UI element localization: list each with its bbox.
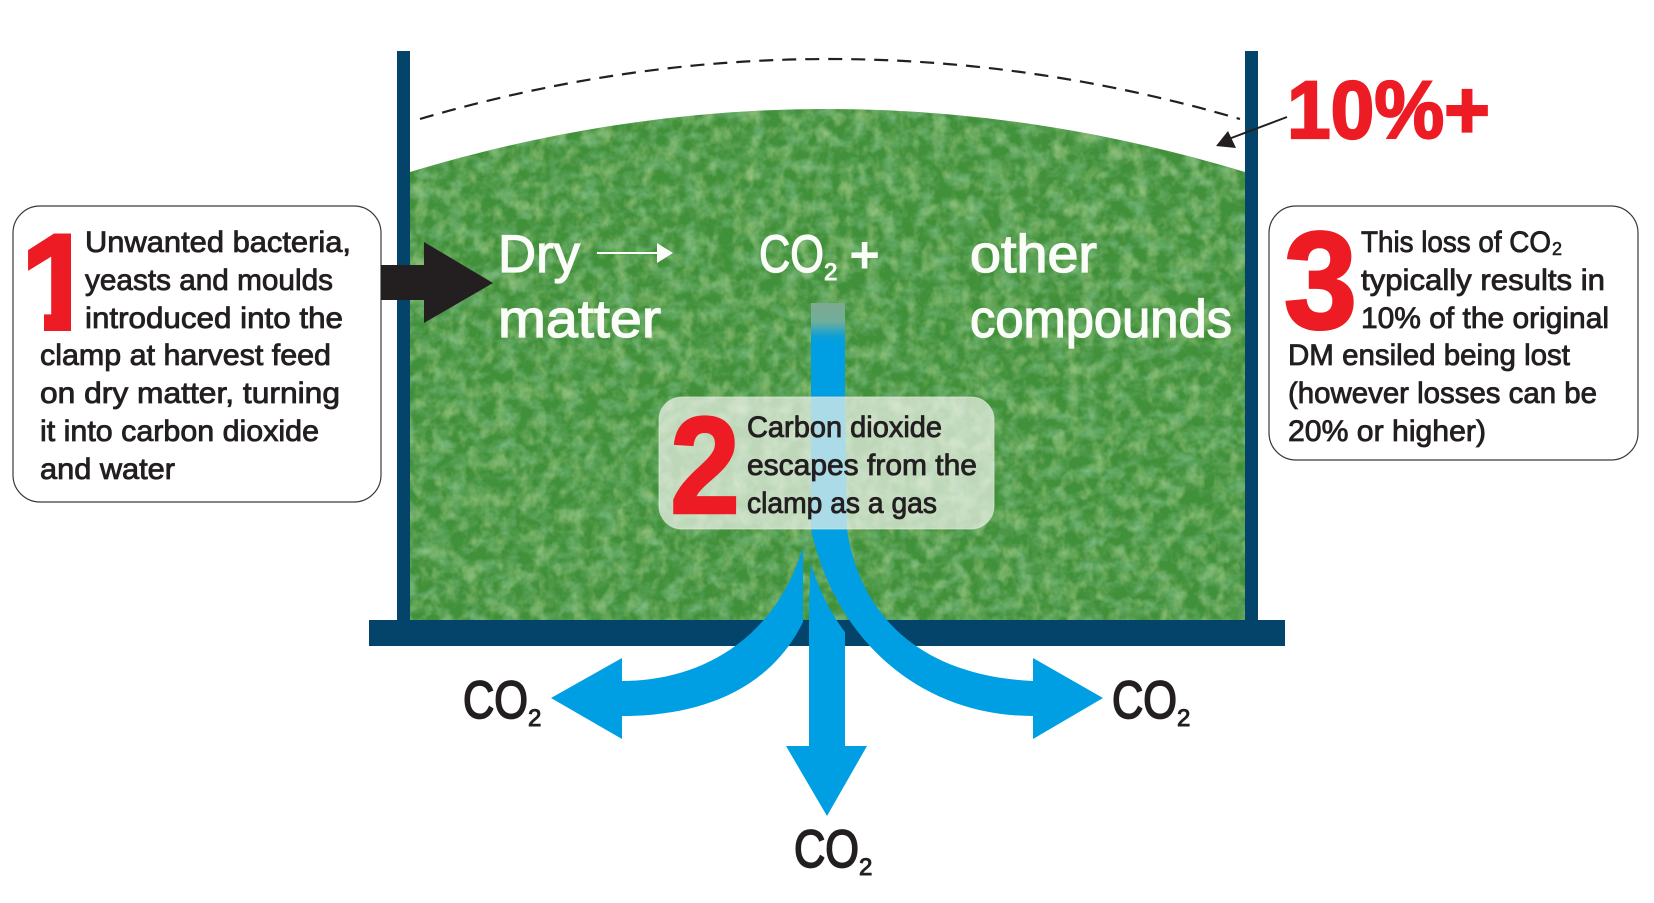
dashed original silage level — [420, 59, 1240, 119]
callout 3: loss: (however losses can be — [1288, 377, 1597, 410]
callout 1: bacteria: Unwanted bacteria, — [85, 226, 351, 259]
big figure: 10%+: 10%+ — [1287, 65, 1490, 156]
callout 1: bacteria: on dry matter, turning — [40, 377, 340, 410]
callout 1: bacteria — [13, 206, 381, 502]
arrow: bacteria entering clamp — [381, 242, 493, 323]
clamp walls and floor — [369, 51, 1285, 646]
callout 1: bacteria: clamp at harvest feed — [40, 339, 331, 372]
callout 1: bacteria: it into carbon dioxide — [40, 415, 319, 448]
callout 3: loss: typically results in — [1361, 264, 1605, 297]
callout 1: bacteria: and water — [40, 453, 175, 486]
equation: dry matter to CO2 and other compounds: 2 — [824, 259, 837, 286]
callout 2: gas escapes — [659, 389, 994, 543]
callout 1: bacteria: 1 — [21, 207, 99, 361]
callout 2: gas escapes: escapes from the — [747, 449, 977, 482]
callout 3: loss: 2 — [1552, 239, 1562, 259]
label: CO2 right: CO — [1112, 671, 1177, 730]
arrow: gas column and three outflows — [551, 303, 1103, 816]
callout 3: loss: DM ensiled being lost — [1288, 339, 1571, 372]
equation: dry matter to CO2 and other compounds: other — [970, 225, 1097, 284]
callout 1: bacteria: yeasts and moulds — [85, 264, 333, 297]
label: CO2 right: 2 — [1177, 705, 1190, 732]
callout 2: gas escapes: 2 — [670, 389, 740, 543]
callout 3: loss: This loss of CO — [1361, 226, 1551, 259]
callout 2: gas escapes: Carbon dioxide — [747, 411, 942, 444]
silage mass — [410, 100, 1245, 620]
callout 3: loss — [1269, 204, 1638, 460]
label: CO2 bottom: CO — [794, 820, 859, 879]
label: CO2 left: 2 — [528, 705, 541, 732]
equation: dry matter to CO2 and other compounds: compounds — [970, 290, 1232, 349]
callout 1: bacteria: introduced into the — [85, 302, 343, 335]
label: CO2 left: CO — [463, 671, 528, 730]
callout 3: loss: 20% or higher) — [1288, 415, 1486, 448]
callout 3: loss: 3 — [1284, 204, 1357, 358]
arrow: 10% pointer — [1216, 117, 1287, 148]
callout 3: loss: 10% of the original — [1361, 302, 1609, 335]
equation: dry matter to CO2 and other compounds: Dry — [498, 225, 580, 284]
equation: dry matter to CO2 and other compounds: matter — [498, 290, 661, 349]
equation: dry matter to CO2 and other compounds — [498, 225, 1232, 349]
equation: dry matter to CO2 and other compounds: + — [850, 227, 879, 283]
label: CO2 bottom: 2 — [859, 854, 872, 881]
callout 2: gas escapes: clamp as a gas — [747, 487, 937, 520]
equation: dry matter to CO2 and other compounds: CO — [759, 225, 824, 284]
